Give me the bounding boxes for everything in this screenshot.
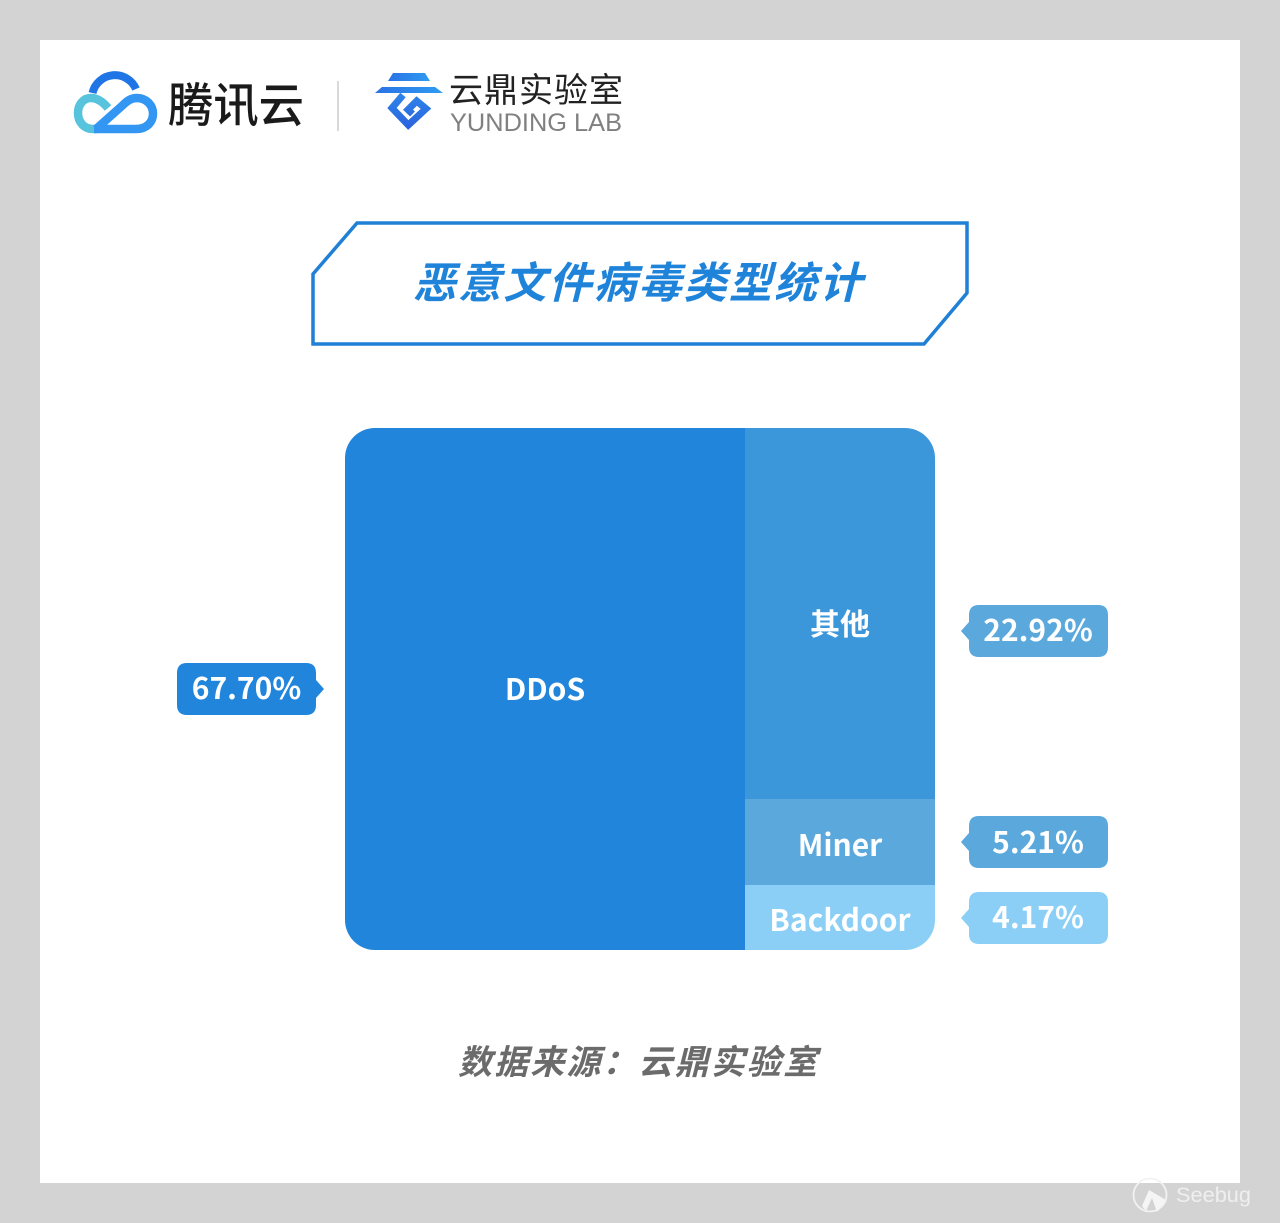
callout: 5.21%: 5.21% (992, 818, 1084, 862)
callout: 67.70% (177, 663, 324, 715)
callout: 22.92%: 22.92% (983, 606, 1093, 650)
logo divider (337, 81, 339, 131)
label: Miner: Miner (798, 821, 883, 865)
label: DDoS: DDoS (505, 665, 585, 709)
callout: 4.17% (961, 892, 1108, 944)
cell: DDoS (345, 428, 745, 950)
icon: Seebug (1134, 1178, 1166, 1212)
callout: 4.17%: 4.17% (992, 893, 1084, 937)
label: other: 其他 (810, 600, 870, 644)
callout: 67.70%: 67.70% (192, 664, 301, 708)
title box (313, 223, 967, 344)
cell: Miner (745, 799, 935, 885)
logo: Tencent Cloud (78, 67, 304, 136)
icon: cloud (78, 75, 153, 129)
cell: other (745, 428, 935, 799)
treemap chart (345, 428, 935, 950)
logo text: YUNDING LAB: YUNDING LAB (450, 109, 622, 137)
logo text: 腾讯云: 腾讯云 (168, 67, 304, 136)
icon: Yunding emblem (375, 73, 443, 125)
label: Backdoor: Backdoor (769, 896, 912, 940)
data source note: 数据来源：云鼎实验室 (458, 1035, 822, 1084)
logo: Yunding Lab (375, 63, 623, 137)
callout: 5.21% (961, 816, 1108, 868)
cell: Backdoor (745, 885, 935, 950)
callout: 22.92% (961, 605, 1108, 657)
logo text: 云鼎实验室: 云鼎实验室 (449, 63, 623, 112)
title: 恶意文件病毒类型统计 (413, 249, 867, 311)
watermark text: Seebug (1176, 1184, 1251, 1207)
watermark: Seebug (1134, 1178, 1251, 1212)
